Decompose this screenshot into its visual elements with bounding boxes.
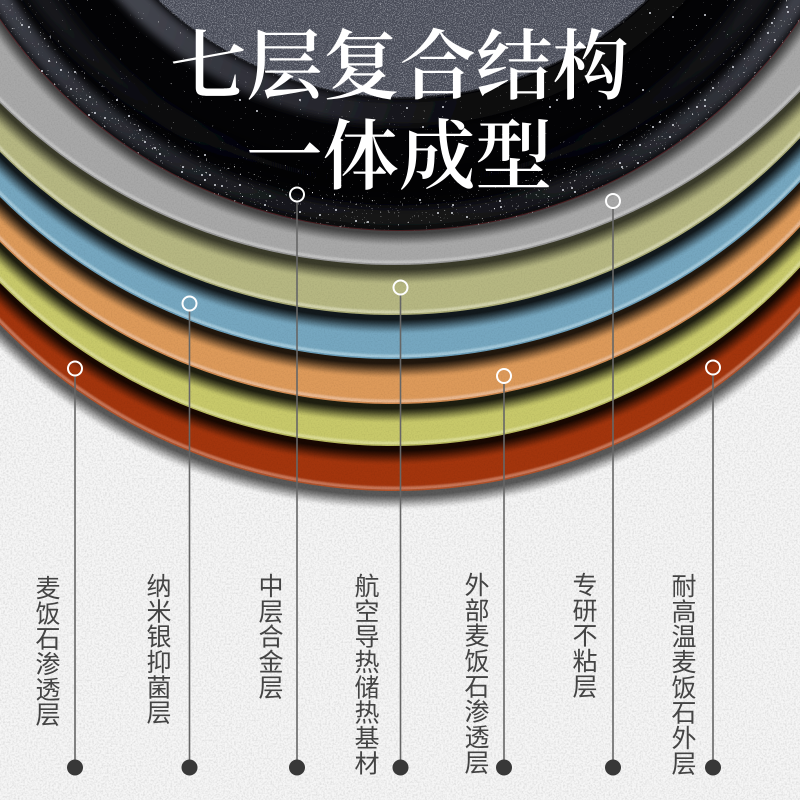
label: 外部麦饭石渗透层: 外部麦饭石渗透层 xyxy=(461,572,489,775)
callout: 外部麦饭石渗透层 xyxy=(496,369,512,776)
label: 耐高温麦饭石外层: 耐高温麦饭石外层 xyxy=(668,573,696,776)
title: 一体成型 xyxy=(246,115,552,200)
speckles xyxy=(0,0,800,250)
surface grain over colored layers xyxy=(0,44,800,491)
large white speckles xyxy=(22,2,788,222)
layer: orange heat-conducting base xyxy=(0,0,800,423)
layer: blue nano-silver layer xyxy=(0,0,800,378)
label: 航空导热储热基材: 航空导热储热基材 xyxy=(351,573,379,776)
label: 中层合金层: 中层合金层 xyxy=(255,573,283,700)
callout: 中层合金层 xyxy=(289,188,305,776)
title: 七层复合结构 xyxy=(170,25,629,110)
label: 麦饭石渗透层: 麦饭石渗透层 xyxy=(32,575,60,727)
callout: 纳米银抑菌层 xyxy=(182,296,198,776)
callout: 航空导热储热基材 xyxy=(392,280,408,776)
layer: gray non-stick base layer xyxy=(0,0,800,284)
label: 纳米银抑菌层: 纳米银抑菌层 xyxy=(143,573,171,725)
callout: 耐高温麦饭石外层 xyxy=(705,360,721,776)
inner ring xyxy=(112,0,686,128)
layer: olive middle alloy layer xyxy=(0,0,800,334)
layer: black speckled pan surface xyxy=(0,0,800,250)
callout: 专研不粘层 xyxy=(605,194,621,776)
outer rim sheen xyxy=(0,0,800,218)
layer: terracotta heat-resistant outer layer xyxy=(0,0,800,510)
callout: 麦饭石渗透层 xyxy=(67,362,83,776)
label: 专研不粘层: 专研不粘层 xyxy=(569,572,597,699)
leader lines, rings and end dots xyxy=(67,188,721,776)
title xyxy=(170,25,629,200)
middle streak xyxy=(28,0,772,176)
layer: yellow-green outer infiltration layer xyxy=(0,0,800,465)
inner gray cooking surface xyxy=(46,0,758,99)
